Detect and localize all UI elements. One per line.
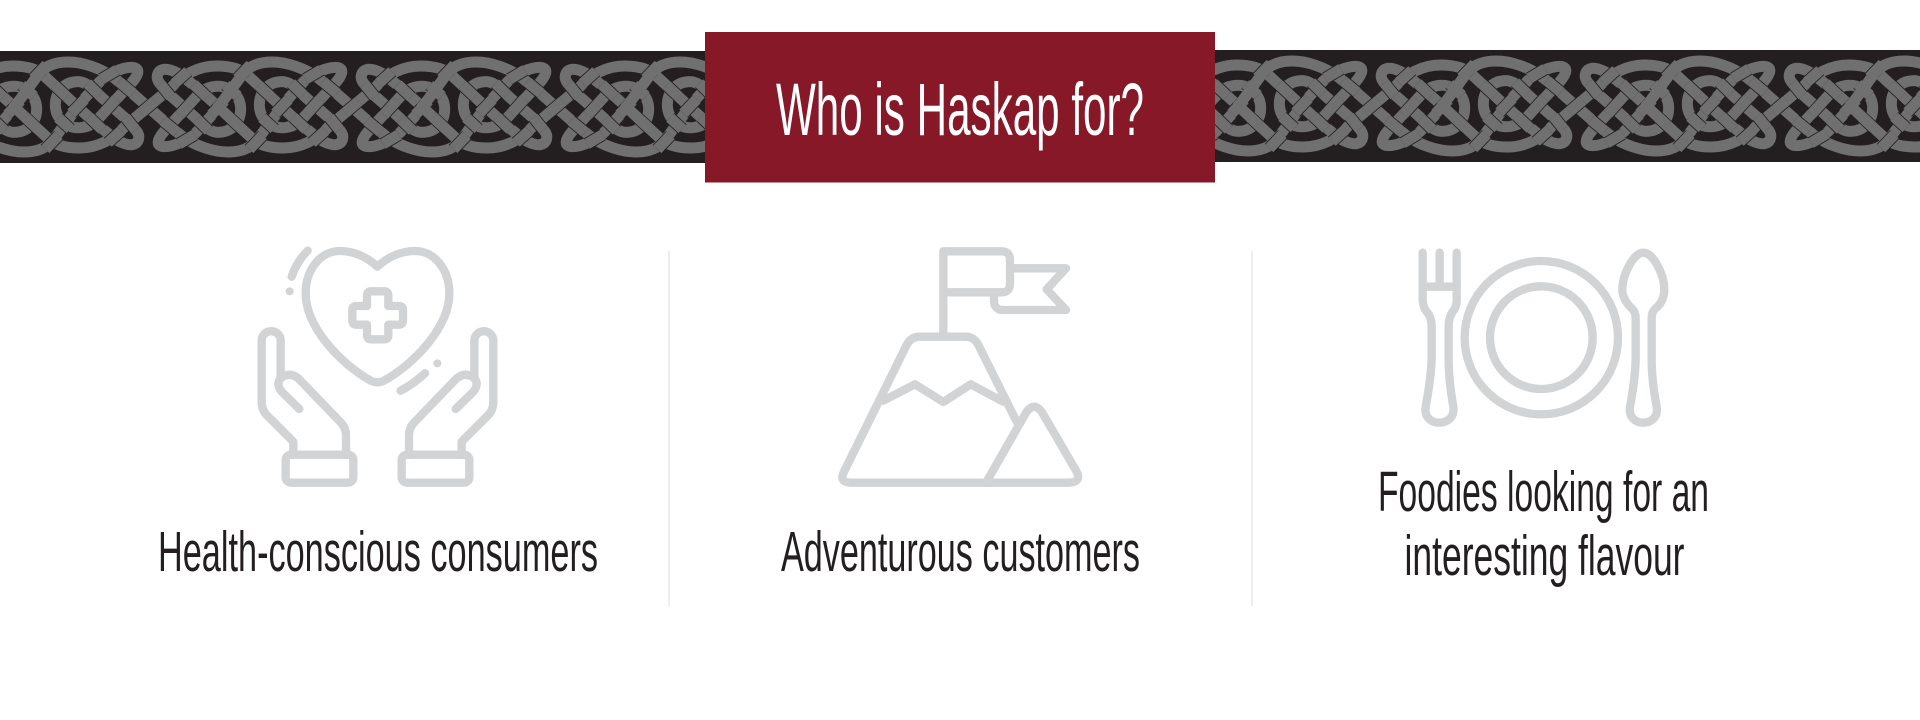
divider left: [668, 251, 670, 606]
divider right: [1251, 251, 1253, 606]
plate: [1465, 261, 1618, 414]
fork: [1423, 253, 1457, 423]
label: health-conscious consumers: Health-conscious consumers: [158, 520, 598, 584]
right knotwork band: [1215, 50, 1920, 162]
flag: [943, 251, 1066, 333]
title banner: [705, 32, 1215, 182]
icon: hands holding heart: [262, 251, 493, 483]
icon: mountain with flag: [842, 251, 1078, 483]
medical cross: [352, 291, 403, 339]
large mountain: [842, 337, 1017, 483]
left hand: [262, 331, 353, 483]
right hand: [402, 331, 493, 483]
label: adventurous customers: Adventurous customers: [781, 520, 1140, 584]
title: Who is Haskap for?: [776, 68, 1144, 151]
icon: plate with fork and spoon: [1423, 253, 1664, 423]
sparkle marks: [286, 251, 441, 391]
label: foodies looking for an interesting flavour: [1378, 460, 1709, 588]
left knotwork band: [0, 51, 705, 163]
label: foodies looking for an interesting flavour: interesting flavour: [1404, 524, 1685, 588]
small mountain: [986, 407, 1078, 483]
heart: [306, 251, 449, 382]
spoon: [1622, 253, 1664, 423]
